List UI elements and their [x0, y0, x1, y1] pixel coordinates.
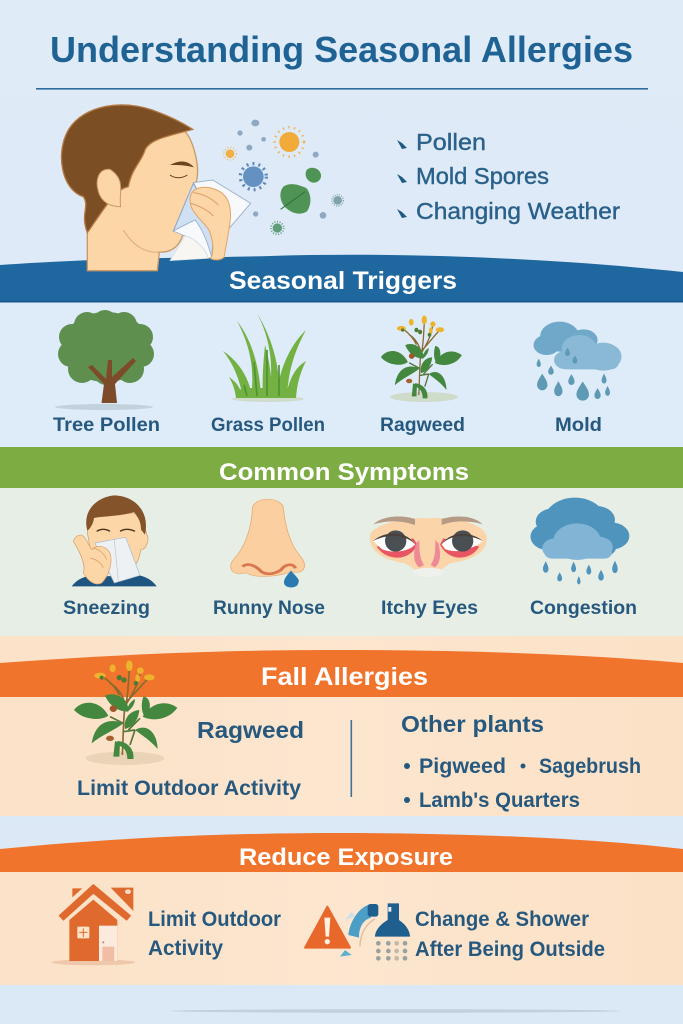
heading: fall allergies: Fall Allergies	[261, 663, 428, 691]
panel: reduce exposure	[0, 833, 683, 985]
text: limit outdoor activity	[148, 908, 281, 960]
icon: shower head and water	[375, 903, 410, 961]
text: ragweed: Ragweed	[197, 717, 304, 743]
icon: mold cloud	[534, 322, 622, 401]
list: allergen types: Pollen	[416, 129, 486, 155]
label: Sneezing	[63, 598, 150, 619]
list: allergen types: Mold Spores	[416, 163, 549, 189]
illustration: person blowing nose	[61, 105, 251, 271]
list: other plants: Lamb's Quarters	[419, 789, 580, 812]
text: limit outdoor activity: Limit Outdoor	[148, 908, 281, 931]
label: Ragweed	[380, 415, 465, 436]
banner: fall allergies	[0, 650, 683, 697]
heading: seasonal triggers: Seasonal Triggers	[229, 267, 457, 295]
icon: shower hose	[340, 904, 378, 957]
list: allergen types: Changing Weather	[416, 198, 620, 224]
icon: runny nose	[231, 499, 305, 587]
icon: ragweed	[381, 315, 462, 402]
heading: reduce exposure: Reduce Exposure	[239, 844, 453, 871]
label: Grass Pollen	[211, 415, 325, 436]
list: other plants: Pigweed	[419, 755, 506, 778]
icon: tree	[55, 310, 154, 410]
icon: house	[52, 884, 135, 965]
heading: common symptoms: Common Symptoms	[219, 459, 469, 486]
icon: ragweed plant	[74, 660, 177, 765]
label: Runny Nose	[213, 598, 325, 619]
banner: reduce exposure	[0, 833, 683, 872]
text: change and shower: Change & Shower	[415, 908, 589, 931]
label: Congestion	[530, 598, 637, 619]
text: other plants: Other plants	[401, 711, 544, 737]
icon: sneezing person	[72, 495, 157, 586]
icon: warning triangle	[305, 907, 350, 948]
banner: seasonal triggers	[0, 255, 683, 302]
text: limit outdoor activity: Limit Outdoor Activity	[77, 777, 301, 800]
icon: allergen particles	[224, 120, 343, 234]
panel: seasonal triggers background	[0, 302, 683, 447]
banner: common symptoms	[0, 447, 683, 488]
label: Itchy Eyes	[381, 598, 478, 619]
list: other plants	[404, 755, 641, 812]
text: limit outdoor activity: Activity	[148, 937, 223, 960]
text: change and shower	[415, 908, 605, 961]
label: Tree Pollen	[53, 415, 160, 436]
footer shadow line	[170, 1009, 620, 1013]
panel: fall allergies	[0, 636, 683, 816]
title: Understanding Seasonal Allergies	[50, 29, 633, 70]
label: Mold	[555, 415, 602, 436]
icon: congestion cloud	[530, 498, 629, 584]
panel: common symptoms background	[0, 488, 683, 636]
icon: itchy eyes	[370, 516, 487, 577]
text: change and shower: After Being Outside	[415, 938, 605, 961]
list: allergen types	[397, 129, 620, 224]
icon: grass	[223, 313, 306, 402]
list: other plants: Sagebrush	[539, 755, 641, 778]
